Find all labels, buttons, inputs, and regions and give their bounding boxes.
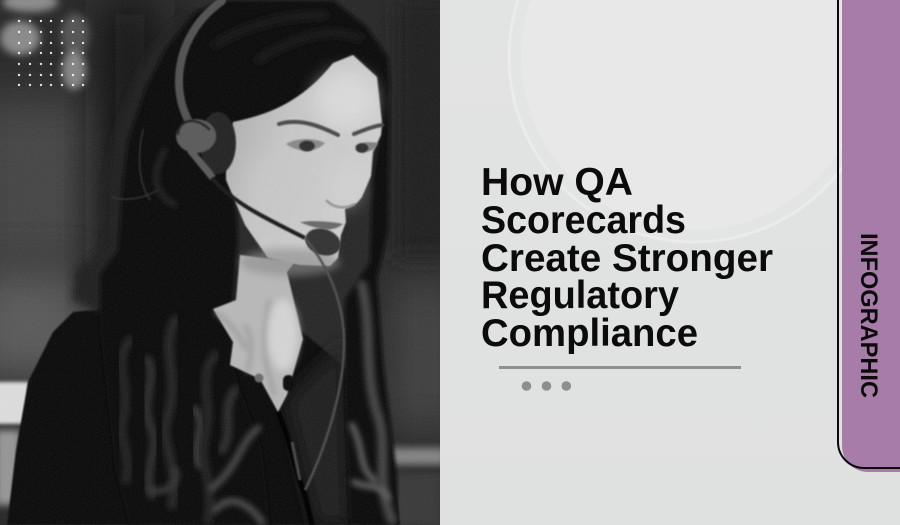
title: Regulatory	[481, 274, 680, 317]
cardigan	[7, 300, 400, 525]
eyes	[286, 139, 378, 153]
headset microphone	[304, 228, 340, 256]
right background panel	[440, 0, 900, 525]
headset cable	[305, 238, 344, 490]
dot grid overlay	[18, 20, 84, 86]
nose shadow	[326, 200, 355, 207]
divider rule	[499, 366, 741, 369]
decorative circle behind title	[509, 0, 879, 242]
headset band	[179, 1, 222, 125]
three dots	[522, 381, 571, 391]
face	[226, 55, 382, 266]
hair mass	[100, 0, 397, 525]
headset boom	[212, 178, 305, 238]
film grain	[0, 0, 440, 525]
eyebrows	[279, 122, 382, 135]
cardigan placket and button	[254, 374, 312, 525]
hair highlights and curls	[112, 15, 392, 522]
photo background: blurred office lights	[0, 0, 455, 525]
title: How QA	[481, 161, 633, 204]
neck and shirt	[213, 255, 303, 412]
title: Compliance	[481, 312, 698, 355]
soft hair edge	[68, 56, 152, 312]
face shading	[240, 72, 375, 276]
lips	[300, 221, 343, 229]
title	[481, 161, 773, 355]
title: Create Stronger	[481, 237, 773, 280]
side tab	[838, 0, 900, 472]
title: Scorecards	[481, 199, 686, 242]
side tab label: INFOGRAPHIC	[855, 233, 882, 398]
photo: call centre agent wearing a headset	[0, 0, 455, 525]
headset ear cup	[176, 112, 236, 178]
